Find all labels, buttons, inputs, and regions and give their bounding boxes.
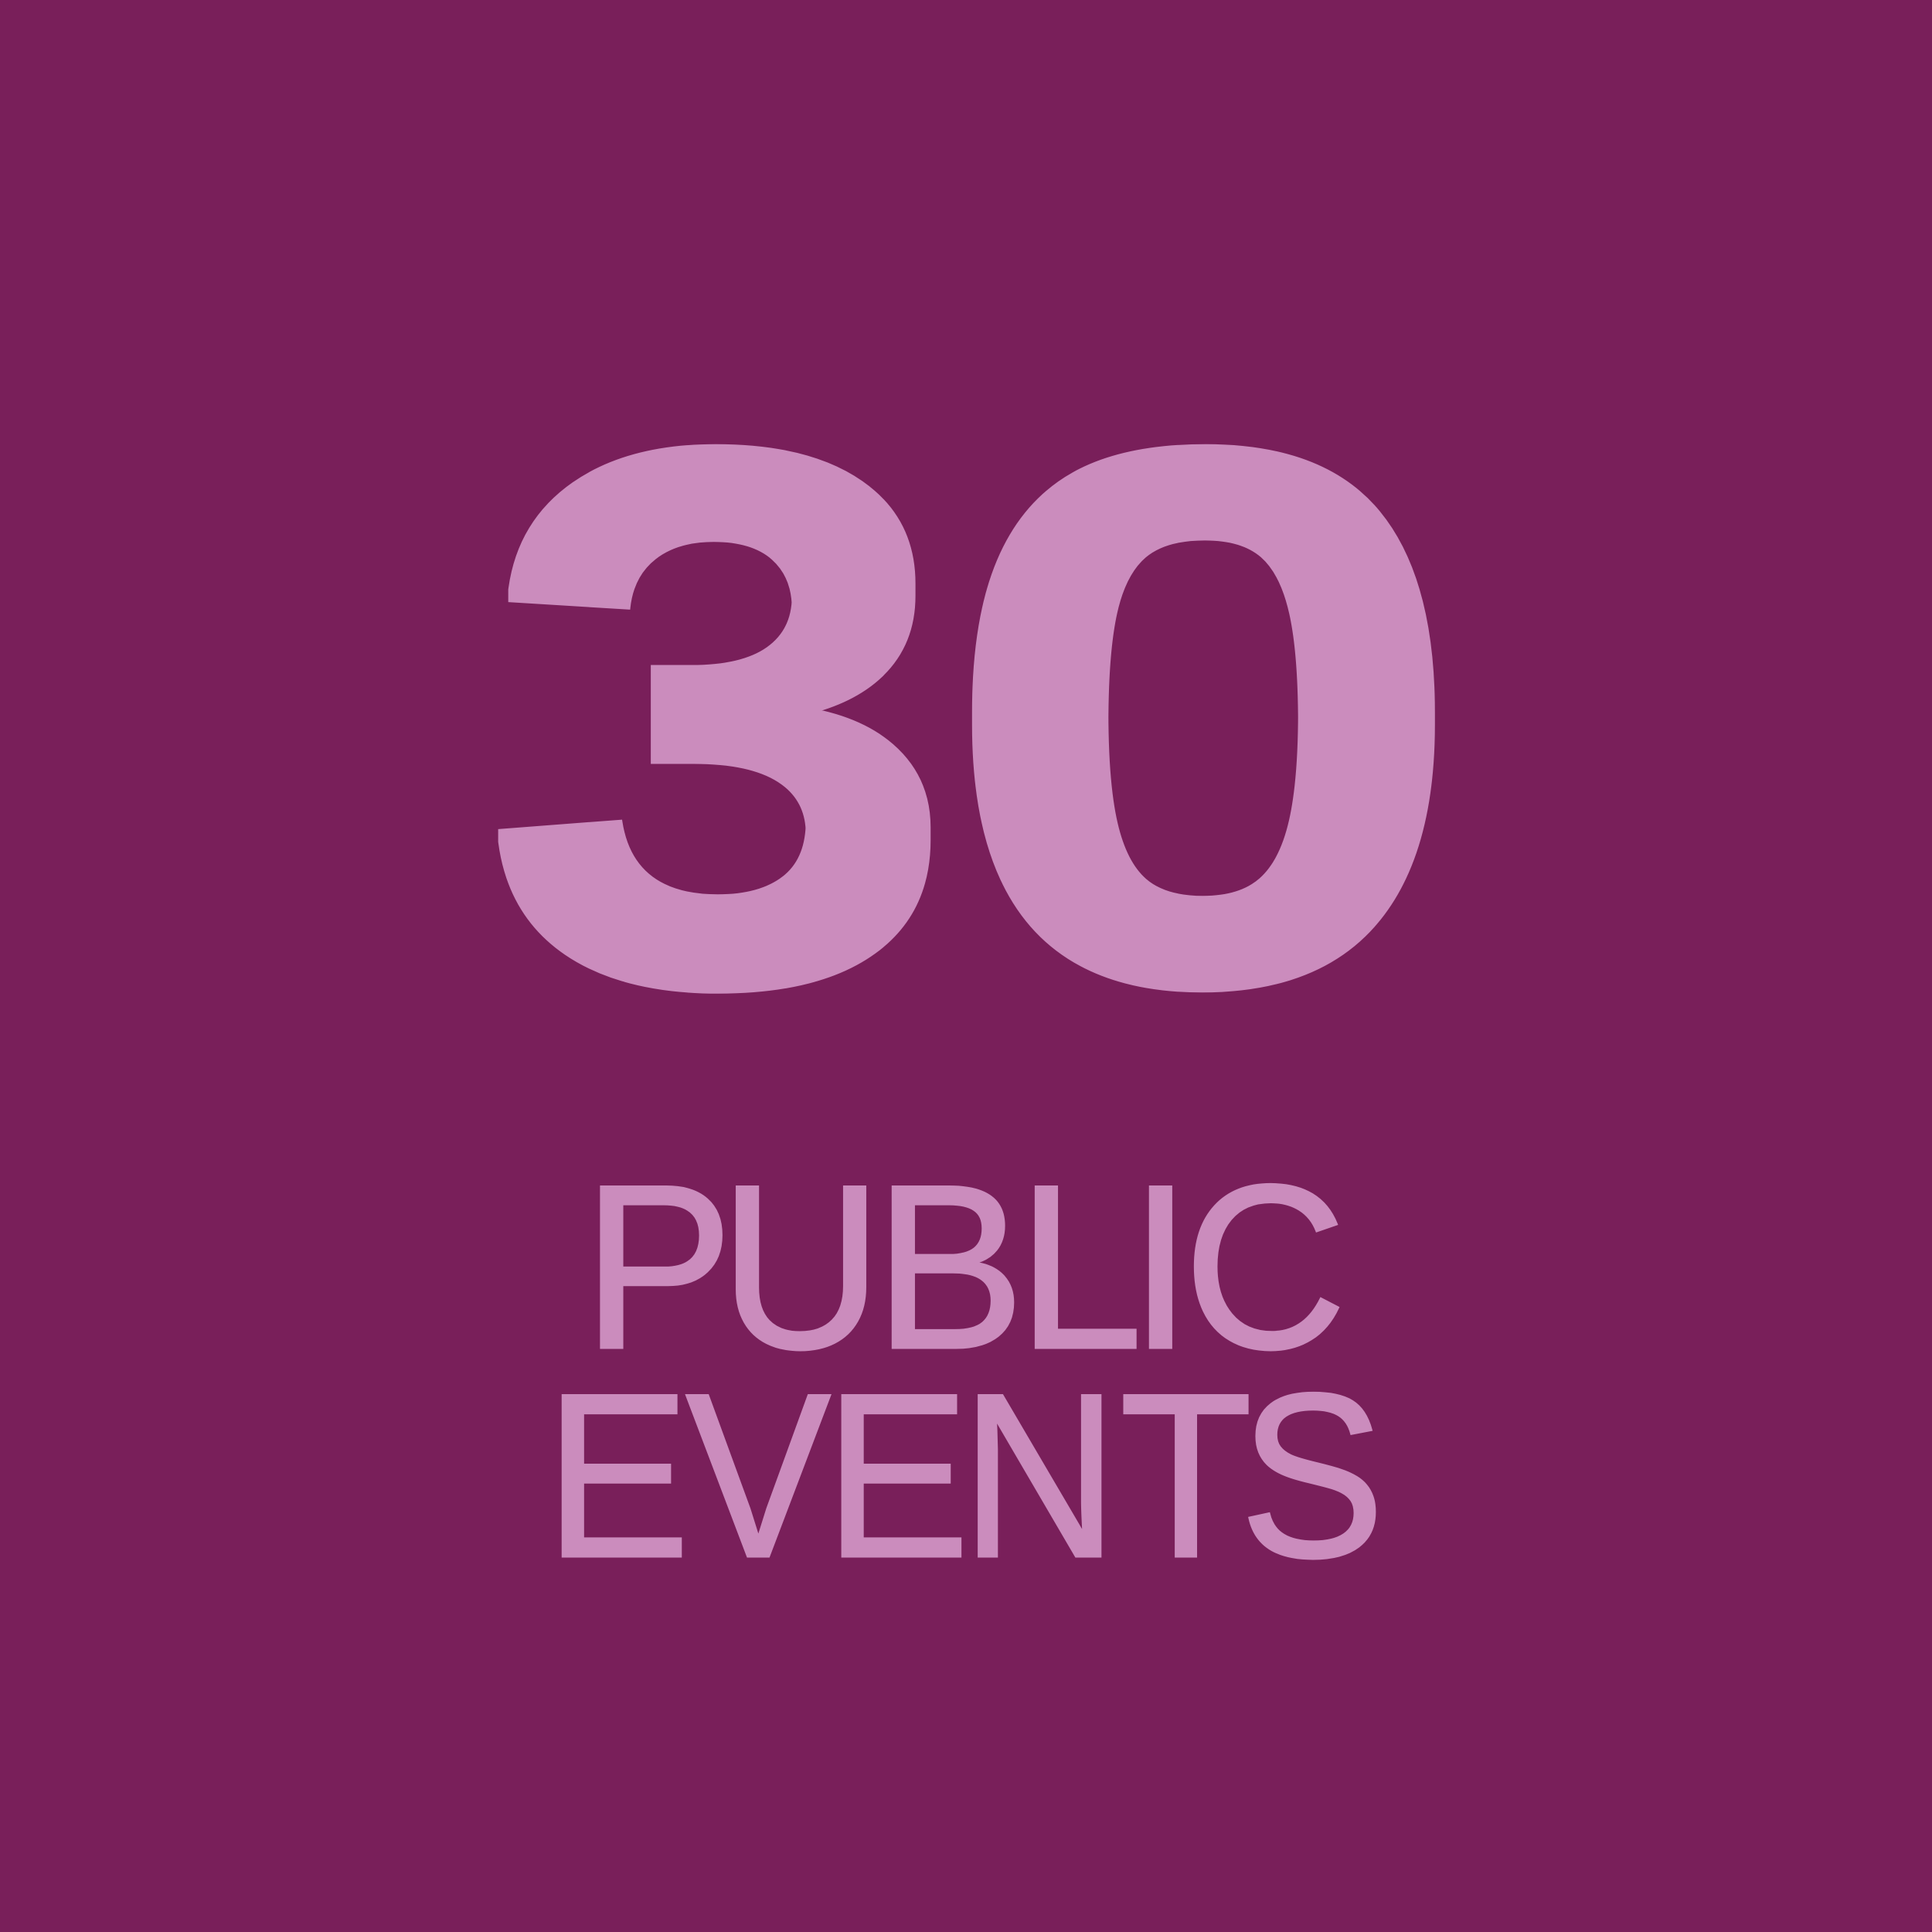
label: PUBLIC EVENTS <box>545 1136 1385 1607</box>
big number: 30 <box>481 296 1472 1138</box>
label: PUBLIC EVENTS: EVENTS <box>545 1345 1385 1607</box>
label: PUBLIC EVENTS: PUBLIC <box>583 1136 1347 1398</box>
big number: 30: 3 <box>481 296 960 1137</box>
big number: 30: 0 <box>936 297 1472 1138</box>
